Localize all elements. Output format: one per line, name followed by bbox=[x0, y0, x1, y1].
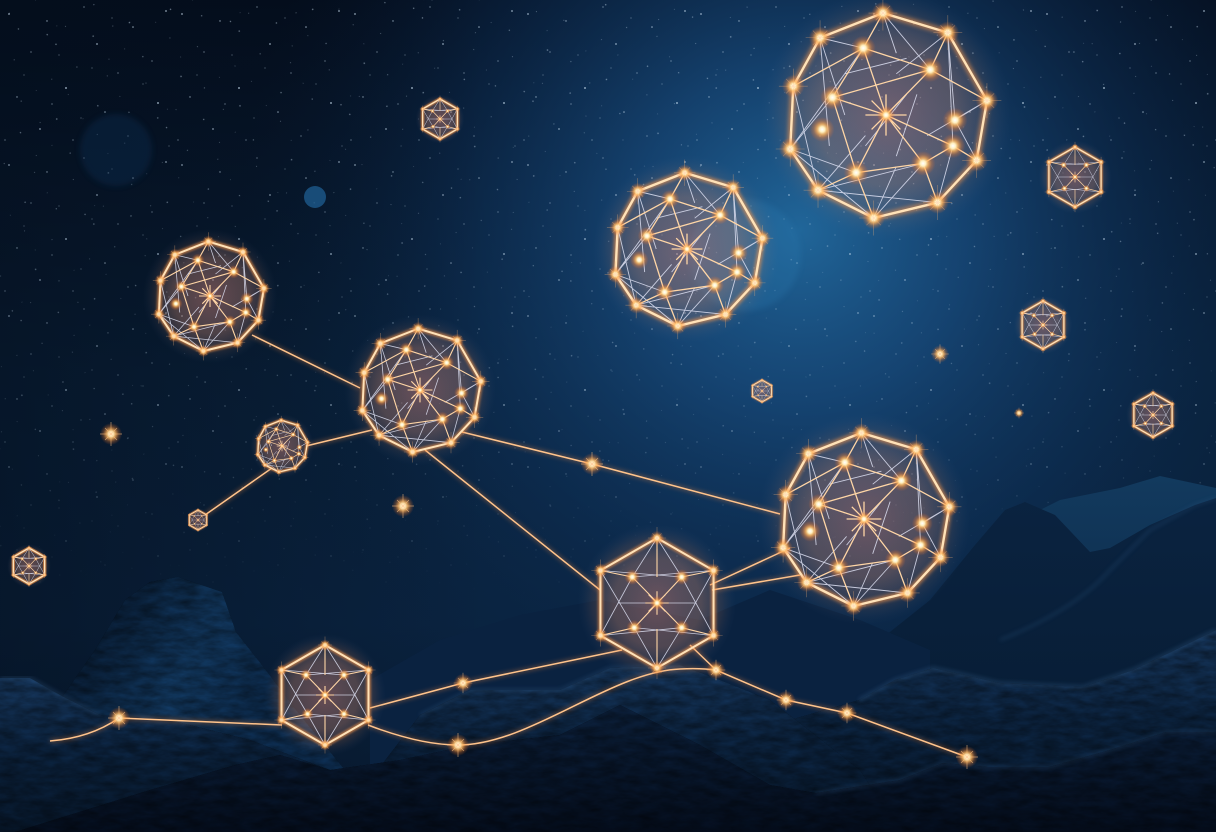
mountains: left lit foothill bbox=[0, 678, 330, 832]
glowing nodes bbox=[100, 344, 1024, 769]
mountains: centre ridges bbox=[370, 665, 900, 832]
icon: tiny polyhedron left bbox=[186, 508, 210, 532]
mountains: hazy far hills bbox=[1000, 476, 1216, 640]
icon: large polyhedron right bbox=[758, 413, 970, 625]
icon: polyhedron upper centre bbox=[593, 155, 781, 343]
icon: hexagonal polyhedron lower left bbox=[264, 634, 386, 756]
star field bbox=[0, 0, 1216, 572]
icon: small polyhedron at left bbox=[250, 414, 314, 478]
mountains: dark peak range bbox=[800, 498, 1216, 832]
icon: small polyhedron top right bbox=[1038, 140, 1112, 214]
mountains: right lit ridge bbox=[790, 630, 1216, 832]
icon: small polyhedron far right bbox=[1126, 388, 1180, 442]
mountains: mid hills behind centre bbox=[370, 590, 930, 832]
icon: small polyhedron top bbox=[416, 95, 464, 143]
icon: small polyhedron right bbox=[1014, 296, 1072, 354]
small distant planets bbox=[80, 114, 801, 311]
icon: large polyhedron top right bbox=[760, 0, 1012, 241]
mountains: dark foreground bbox=[15, 705, 1216, 832]
icon: small polyhedron far left bbox=[7, 544, 51, 588]
icon: tiny polyhedron centre bbox=[749, 378, 775, 404]
connecting lines bbox=[50, 335, 967, 757]
icon: polyhedron centre left bbox=[344, 314, 496, 466]
icon: polyhedron left bbox=[143, 229, 277, 363]
icon: hexagonal polyhedron lower centre bbox=[578, 524, 736, 682]
mountains: left peak bbox=[40, 577, 345, 832]
